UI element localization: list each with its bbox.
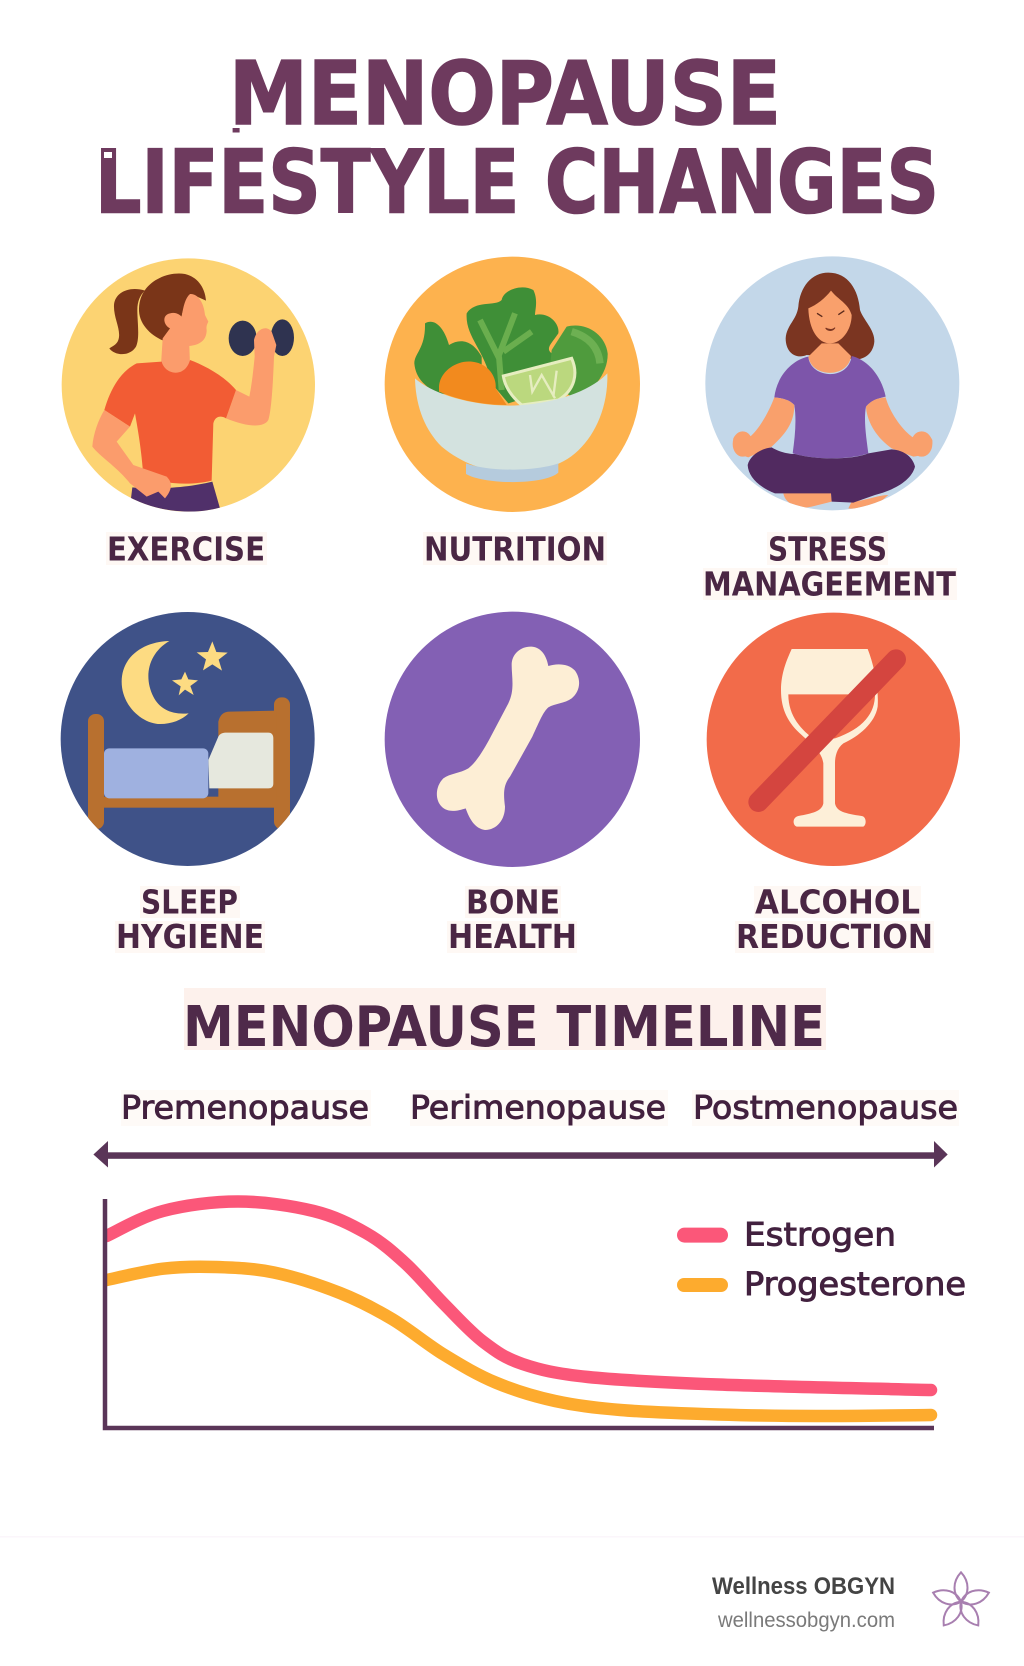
label: alcohol reduction: REDUCTION — [736, 917, 933, 956]
panel: nutrition — [385, 257, 640, 568]
footer brand text — [712, 1573, 895, 1632]
legend — [677, 1216, 966, 1303]
icon: woman lifting a dumbbell — [62, 258, 315, 512]
legend: Progesterone — [744, 1265, 966, 1303]
label: nutrition: NUTRITION — [424, 530, 606, 568]
chart: hormone levels — [105, 1199, 934, 1428]
panel: exercise — [62, 258, 315, 568]
heading: menopause timeline: MENOPAUSE TIMELINE — [183, 995, 825, 1060]
title — [95, 43, 939, 234]
label: stress management: STRESS — [768, 530, 887, 568]
chart axes — [105, 1199, 934, 1428]
icon: crossed-out wine glass — [707, 613, 960, 866]
label: stress management — [703, 530, 957, 604]
panel: sleep hygiene — [61, 612, 315, 956]
timeline stage labels: Postmenopause — [693, 1088, 958, 1126]
icon: bone — [385, 612, 640, 867]
label: exercise: EXERCISE — [107, 530, 265, 568]
icon: flower logo — [931, 1572, 991, 1629]
label: bone health — [447, 882, 577, 956]
footer brand text: Wellness OBGYN — [712, 1573, 895, 1600]
title: MENOPAUSE — [229, 43, 781, 145]
label: bone health: HEALTH — [448, 917, 577, 956]
curve: estrogen — [106, 1202, 931, 1390]
timeline stage labels: Premenopause — [121, 1088, 369, 1126]
icon: bed with moon and stars — [61, 612, 315, 866]
panel: stress management — [703, 256, 959, 604]
legend: Estrogen — [744, 1216, 896, 1254]
arrow: timeline double arrow — [93, 1141, 948, 1168]
timeline stage labels — [121, 1088, 959, 1126]
label: stress management: MANAGEEMENT — [703, 564, 956, 604]
label: sleep hygiene: SLEEP — [141, 882, 238, 922]
label: sleep hygiene — [115, 882, 265, 956]
footer brand text: wellnessobgyn.com — [717, 1609, 895, 1632]
label: bone health: BONE — [466, 882, 560, 922]
label: alcohol reduction: ALCOHOL — [755, 882, 920, 922]
icon: salad bowl — [385, 257, 640, 512]
label: sleep hygiene: HYGIENE — [116, 917, 264, 956]
icon: meditating woman — [705, 256, 959, 510]
timeline stage labels: Perimenopause — [410, 1088, 666, 1126]
curve: progesterone — [106, 1267, 931, 1416]
label: alcohol reduction — [735, 882, 934, 956]
panel: bone health — [385, 612, 640, 956]
panel: alcohol reduction — [707, 613, 960, 956]
